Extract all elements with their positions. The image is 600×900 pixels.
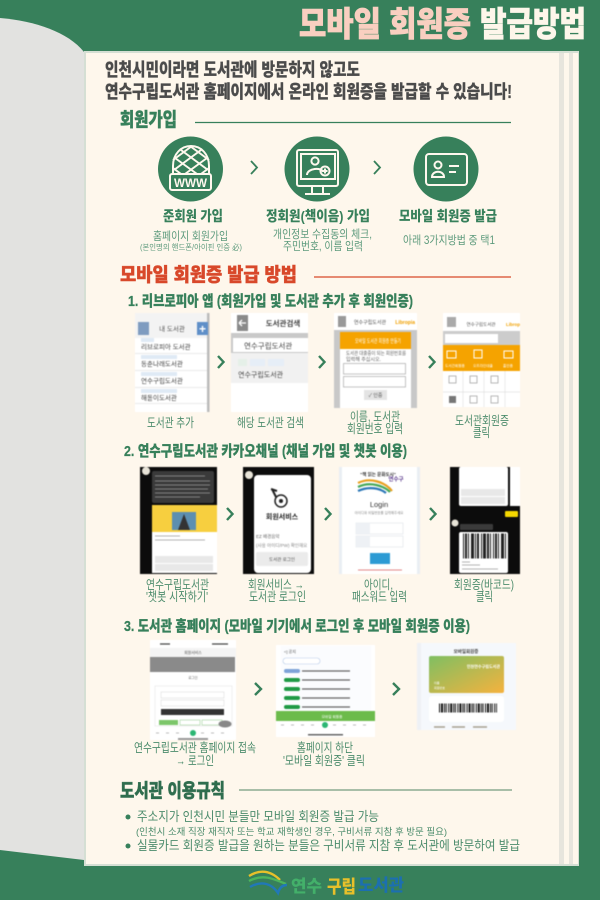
- captions row 2: 연수구립도서관: [146, 578, 209, 592]
- screenshot: Login: Login: [370, 500, 388, 509]
- screenshot: 도서관 검색: [231, 313, 308, 412]
- captions row 2: 패스워드 입력: [352, 590, 407, 604]
- step: 준회원 가입: 홈페이지 회원가입: [153, 229, 228, 243]
- captions row 2: 아이디,: [364, 578, 393, 592]
- arrow: [255, 683, 261, 695]
- screenshot: 회원번호 입력: Libropia: [395, 320, 415, 326]
- screenshot: 홈페이지 하단: <] 공지: [284, 648, 296, 654]
- captions row 1: 회원번호 입력: [347, 422, 403, 436]
- arrow: [227, 508, 232, 520]
- screenshot: 도서관 검색: 연수구립도서관: [244, 340, 292, 350]
- screenshot: 도서관 검색: 도서관검색: [266, 318, 300, 328]
- icon: ID card: [414, 136, 478, 202]
- intro text: 연수구립도서관 홈페이지에서 온라인 회원증을 발급할 수 있습니다!: [105, 81, 512, 102]
- screenshot: 도서관회원증 메뉴: 홈인증: [503, 363, 514, 368]
- step: 정회원 가입: [266, 208, 372, 253]
- screenshot: 회원서비스: [243, 467, 314, 574]
- screenshot: Login: [339, 467, 420, 574]
- screenshot: Login: "책 읽는 문화도시": [360, 471, 396, 478]
- step: 정회원 가입: 개인정보 수집동의 체크,: [273, 228, 372, 241]
- screenshot: 회원번호 입력: 입력해 주십시오.: [346, 356, 381, 363]
- heading: 도서관 이용규칙: 도서관 이용규칙: [120, 780, 225, 802]
- screenshot: 내 도서관: [135, 313, 210, 412]
- screenshot: 회원번호 입력: 연수구립도서관: [354, 319, 386, 326]
- icon: www globe: WWW: [174, 176, 208, 190]
- arrow: [430, 508, 436, 520]
- screenshot: 도서관회원증 메뉴: [443, 313, 520, 407]
- captions row 1: 도서관회원증: [455, 414, 509, 428]
- screenshot: 회원서비스: (사용 아이디/PW) 확인해요: [256, 542, 307, 549]
- captions row 3: 홈페이지 하단: [297, 741, 353, 755]
- captions row 1: [147, 410, 509, 440]
- screenshot: Login: 아이디와 비밀번호를 입력해주세요: [355, 510, 403, 515]
- intro text: [105, 60, 512, 102]
- screenshot: 내 도서관: 리브로피아 도서관: [141, 342, 191, 351]
- screenshot: 내 도서관: 내 도서관: [159, 324, 185, 333]
- icon: www globe: [158, 136, 223, 202]
- screenshot: 회원서비스: 회원서비스: [266, 512, 299, 521]
- screenshot: 회원번호 입력: 도서관 대출증이 되는 회원번호를: [346, 350, 406, 357]
- captions row 3: → 로그인: [176, 754, 214, 768]
- heading: 모바일 회원증 발급 방법: 모바일 회원증 발급 방법: [120, 264, 297, 286]
- step: 정회원 가입: 정회원(책이음) 가입: [266, 208, 370, 224]
- screenshot: 내 도서관: 동춘나래도서관: [141, 359, 183, 368]
- screenshot: 회원서비스: 도서관 로그인: [269, 556, 295, 563]
- screenshot: 도서관회원증 메뉴: 오프라인대출: [473, 363, 494, 368]
- screenshot: 도서관회원증 메뉴: Librop: [506, 322, 520, 327]
- arrow: [218, 356, 224, 368]
- step: 정회원 가입: 주민번호, 이름 입력: [283, 240, 363, 253]
- logo: 도서관: [358, 876, 404, 895]
- screenshot: 모바일 회원증: 회원번호: [434, 685, 445, 690]
- heading: 회원가입: 회원가입: [120, 109, 177, 131]
- step: 준회원 가입: 준회원 가입: [163, 208, 223, 224]
- screenshot: 홈페이지 하단: [276, 645, 375, 737]
- step: 준회원 가입: [140, 208, 242, 252]
- icon: monitor with user: [284, 136, 350, 202]
- rules list: 주소지가 인천시민 분들만 모바일 회원증 발급 가능: [137, 809, 379, 824]
- captions row 2: 회원서비스 →: [248, 578, 304, 592]
- captions row 2: 클릭: [476, 590, 493, 604]
- captions row 3: 연수구립도서관 홈페이지 접속: [134, 741, 256, 755]
- screenshot: 모바일 회원증: 모바일회원증: [454, 648, 478, 655]
- captions row 1: 해당 도서관 검색: [237, 416, 304, 430]
- screenshot: 홈페이지 하단: 모바일 회원증: [322, 714, 343, 719]
- rules list: [126, 809, 520, 853]
- rules list: (인천시 소재 직장 재직자 또는 학교 재학생인 경우, 구비서류 지참 후 방문 필요): [136, 826, 447, 838]
- subheading 3: 3. 도서관 홈페이지 (모바일 기기에서 로그인 후 모바일 회원증 이용): [124, 617, 470, 635]
- logo: 연수: [291, 877, 322, 896]
- captions row 2: 회원증(바코드): [454, 578, 514, 592]
- captions row 3: [134, 741, 365, 768]
- arrow: [251, 161, 257, 174]
- arrow: [325, 508, 330, 520]
- screenshot: 모바일 회원증: 인천연수구립도서관: [467, 663, 500, 669]
- arrow: [319, 356, 324, 368]
- captions row 1: 도서관 추가: [147, 416, 194, 430]
- step: 모바일 회원증 발급: [399, 208, 497, 247]
- screenshot: 모바일 회원증: [417, 643, 516, 730]
- rules list: 실물카드 회원증 발급을 원하는 분들은 구비서류 지참 후 도서관에 방문하여 발급: [137, 838, 520, 853]
- screenshot: 도서관회원증 메뉴: 연수구립도서관: [467, 321, 495, 328]
- screenshot: 회원번호 입력: [334, 313, 417, 408]
- screenshot: 내 도서관: 연수구립도서관: [141, 376, 183, 385]
- screenshot: 홈페이지 로그인: [150, 640, 236, 740]
- captions row 2: '챗봇 시작하기': [146, 589, 208, 604]
- arrow: [374, 161, 380, 174]
- grey page curve: [0, 18, 84, 860]
- captions row 1: 클릭: [473, 426, 490, 440]
- notebook card: [84, 51, 579, 866]
- step: 모바일 회원증 발급: 모바일 회원증 발급: [399, 208, 497, 224]
- screenshot: 회원번호 입력: ✓ 인증: [368, 392, 383, 399]
- title: 모바일 회원증: [299, 6, 471, 44]
- captions row 1: 이름, 도서관: [350, 410, 400, 424]
- step: 준회원 가입: (본인명의 핸드폰/아이핀 인증 必): [140, 242, 242, 252]
- screenshot: 도서관회원증 메뉴: 도서관회원증: [445, 363, 466, 368]
- captions row 3: '모바일 회원증' 클릭: [283, 754, 365, 768]
- intro text: 인천시민이라면 도서관에 방문하지 않고도: [105, 60, 360, 80]
- screenshot: 회원번호 입력: 모바일 도서관 회원증 만들기: [355, 337, 401, 345]
- title: [299, 6, 586, 44]
- screenshot: 홈페이지 로그인: 로그인: [188, 675, 198, 680]
- screenshot: 바코드: [450, 467, 520, 574]
- arrow: [393, 683, 399, 695]
- step: 모바일 회원증 발급: 아래 3가지방법 중 택1: [403, 234, 495, 247]
- subheading 2: 2. 연수구립도서관 카카오채널 (채널 가입 및 챗봇 이용): [124, 442, 407, 460]
- arrow: [429, 356, 434, 368]
- logo: [249, 872, 404, 897]
- captions row 2: [146, 578, 514, 604]
- screenshot: 챗봇: [140, 467, 217, 574]
- screenshot: 홈페이지 로그인: 회원서비스: [184, 650, 202, 655]
- subheading 1: 1. 리브로피아 앱 (회원가입 및 도서관 추가 후 회원인증): [128, 292, 413, 310]
- screenshot: 회원서비스: EZ 배경음악: [256, 533, 280, 540]
- captions row 2: 도서관 로그인: [249, 590, 306, 604]
- screenshot: 모바일 회원증: 이름: [434, 680, 440, 685]
- screenshot: 내 도서관: 해돋이도서관: [141, 393, 177, 402]
- screenshot: Login: 연수구: [388, 475, 404, 483]
- logo: 구립: [327, 877, 356, 897]
- screenshot: 도서관 검색: 연수구립도서관: [238, 370, 284, 379]
- screenshot: 내 도서관: +: [199, 322, 206, 336]
